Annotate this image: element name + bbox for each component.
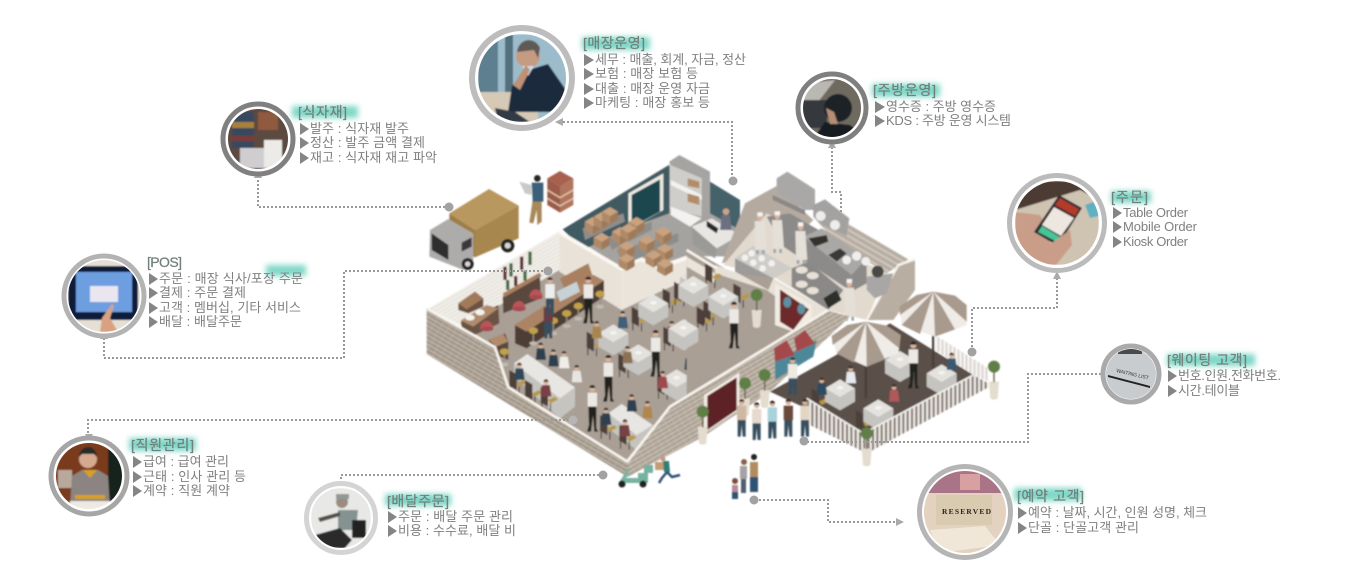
kitchen, entrance and terrace <box>627 172 1000 477</box>
glow: 주방운영 <box>872 84 940 97</box>
list: 주문: Kiosk Order <box>1123 234 1189 249</box>
front left brick wall <box>427 308 627 477</box>
plate counter <box>735 246 792 290</box>
list: POS: 주문 : 매장 식사/포장 주문 <box>159 271 303 286</box>
interior floor right part <box>687 247 827 397</box>
list: 식자재: 발주 : 식자재 발주 <box>310 121 409 136</box>
glow: 주문 <box>1111 191 1151 203</box>
pendant lamps <box>480 289 543 331</box>
heading: 웨이팅 고객: [웨이팅 고객] <box>1167 352 1247 368</box>
food display and kiosk <box>792 262 843 310</box>
storage shelves with boxes <box>583 207 678 276</box>
list: POS: 고객 : 멤버십, 기타 서비스 <box>159 300 301 315</box>
right brick wall <box>627 311 850 477</box>
seated guests <box>514 311 695 437</box>
right kitchen wall <box>867 259 915 320</box>
kitchen tile floor <box>813 217 908 273</box>
list: POS: 배달 : 배달주문 <box>159 314 242 329</box>
heading: 예약 고객: [예약 고객] <box>1017 488 1084 504</box>
panel: 주방운영 <box>798 74 1011 142</box>
glow: 배달주문 <box>385 494 451 506</box>
storage teal wall <box>563 165 669 250</box>
list: 주방운영: KDS : 주방 운영 시스템 <box>886 113 1011 128</box>
connector: 직원관리 <box>85 416 578 440</box>
list: 주문: Table Order <box>1123 205 1189 220</box>
panel: 예약 고객 <box>920 466 1207 558</box>
worker with clipboard <box>519 175 543 225</box>
chefs <box>755 211 856 321</box>
photo: reserved sign <box>920 466 1010 558</box>
kitchen back wall <box>722 186 813 263</box>
connector: 식자재 <box>254 170 454 212</box>
back cream walls <box>559 232 622 310</box>
delivery scooter and courier <box>618 456 680 488</box>
list: 예약 고객 <box>1018 505 1207 535</box>
photo: grocery shelves <box>223 104 293 174</box>
floor <box>463 265 760 460</box>
storage door <box>628 173 663 230</box>
delivery truck <box>429 189 519 270</box>
list: 배달주문: 주문 : 배달 주문 관리 <box>398 509 513 524</box>
list: 주방운영: 영수증 : 주방 영수증 <box>886 99 996 114</box>
storage room floor <box>563 165 740 268</box>
potted plants <box>697 361 1000 466</box>
connector: POS <box>100 266 552 358</box>
side cabinets <box>458 292 508 360</box>
dining hall and storage room <box>427 155 760 477</box>
list: 웨이팅 고객: 번호.인원.전화번호. <box>1178 368 1281 383</box>
left white brick wall <box>428 232 559 327</box>
list: 배달주문: 비용 : 수수료, 배달 비 <box>398 523 516 538</box>
list: 직원관리 <box>133 454 246 498</box>
heading: 배달주문: [배달주문] <box>387 493 449 509</box>
range hoods <box>773 172 849 236</box>
bar counter <box>514 263 604 348</box>
glow: 예약 고객 <box>1014 488 1082 501</box>
photo: waiting list clipboard: WAITING LIST <box>1116 368 1149 381</box>
list: 매장운영: 마케팅 : 매장 홍보 등 <box>595 95 710 110</box>
list: POS <box>149 271 303 329</box>
list: 직원관리: 계약 : 직원 계약 <box>143 483 230 498</box>
photo: smartphone order <box>1010 176 1104 270</box>
list: 식자재: 재고 : 식자재 재고 파악 <box>310 150 437 165</box>
panel: 주문 <box>1010 176 1198 270</box>
terrace furniture and guests <box>788 342 957 435</box>
list: 주문 <box>1113 205 1198 249</box>
glow: 웨이팅 고객 <box>1167 354 1255 366</box>
photo: businessman <box>472 28 572 128</box>
panel: POS <box>64 254 306 336</box>
terrace floor <box>770 323 973 435</box>
panel: 식자재 <box>223 104 437 174</box>
stacked crates <box>547 171 573 213</box>
umbrella rear <box>899 292 967 368</box>
glow: 식자재 <box>292 106 358 118</box>
kitchen floor <box>723 213 887 320</box>
list: 웨이팅 고객 <box>1168 368 1281 398</box>
list: 주방운영 <box>875 99 1011 128</box>
list: 매장운영: 대출 : 매장 운영 자금 <box>595 81 710 96</box>
list: 식자재 <box>300 121 437 165</box>
bar back shelf with bottles <box>503 252 542 313</box>
photo: staff member <box>51 438 127 514</box>
panel: 직원관리 <box>51 437 246 514</box>
list: 배달주문 <box>388 509 516 538</box>
dining tables <box>587 263 751 400</box>
list: 직원관리: 급여 : 급여 관리 <box>143 454 229 469</box>
list: 예약 고객: 예약 : 날짜, 시간, 인원 성명, 체크 <box>1028 505 1207 520</box>
glow: POS <box>266 265 306 276</box>
connector: 예약 고객 <box>750 496 904 526</box>
queue of waiting customers <box>737 399 810 440</box>
bar staff <box>544 277 594 338</box>
heading: POS: [POS] <box>147 254 182 270</box>
list: 매장운영: 세무 : 매출, 회계, 자금, 정산 <box>595 52 746 67</box>
entrance door <box>704 373 739 433</box>
long tables <box>509 354 653 450</box>
list: 주문: Mobile Order <box>1123 219 1198 234</box>
kitchen door <box>775 283 812 332</box>
list: 식자재: 정산 : 발주 금액 결제 <box>310 135 425 150</box>
list: 매장운영: 보험 : 매장 보험 등 <box>595 66 698 81</box>
list: POS: 결제 : 주문 결제 <box>159 285 246 300</box>
terrace front railing <box>807 375 988 453</box>
connector: 주방운영 <box>828 140 841 212</box>
photo: delivery rider <box>306 484 376 552</box>
bar stools <box>500 291 605 366</box>
photo: reserved sign: RESERVED <box>942 507 992 516</box>
heading: 식자재: [식자재] <box>298 104 347 120</box>
waiters <box>587 302 740 432</box>
kitchen equipment <box>767 213 893 298</box>
photo: kitchen worker <box>798 74 866 142</box>
glow: 직원관리 <box>129 438 196 451</box>
tall storage rack <box>669 155 710 227</box>
panel: 매장운영 <box>472 28 746 128</box>
heading: 매장운영: [매장운영] <box>583 35 645 51</box>
heading: 직원관리: [직원관리] <box>131 437 194 453</box>
heading: 주방운영: [주방운영] <box>873 82 936 98</box>
connector: 매장운영 <box>555 118 738 186</box>
glow: 매장운영 <box>582 37 650 50</box>
family walking <box>732 454 758 499</box>
connector: 웨이팅 고객 <box>800 374 1101 446</box>
list: 예약 고객: 단골 : 단골고객 관리 <box>1028 520 1139 535</box>
photo: waiting list clipboard <box>1103 346 1159 402</box>
terrace back railing <box>935 335 988 382</box>
windows with awnings <box>774 330 817 380</box>
list: 직원관리: 근태 : 인사 관리 등 <box>143 469 246 484</box>
panel: 배달주문 <box>306 484 516 552</box>
connector: 주문 <box>968 271 1061 356</box>
umbrella front <box>832 322 901 398</box>
interior divider wall <box>715 265 828 322</box>
isometric restaurant illustration <box>427 155 1000 499</box>
indoor tables and waiter <box>668 263 763 350</box>
panel: 웨이팅 고객 <box>1103 346 1281 402</box>
office desk <box>692 208 740 258</box>
heading: 주문: [주문] <box>1111 189 1148 205</box>
list: 매장운영 <box>584 52 746 110</box>
photo: POS touch screen <box>64 256 144 336</box>
connector: 배달주문 <box>337 470 608 491</box>
list: 웨이팅 고객: 시간.테이블 <box>1178 383 1240 398</box>
